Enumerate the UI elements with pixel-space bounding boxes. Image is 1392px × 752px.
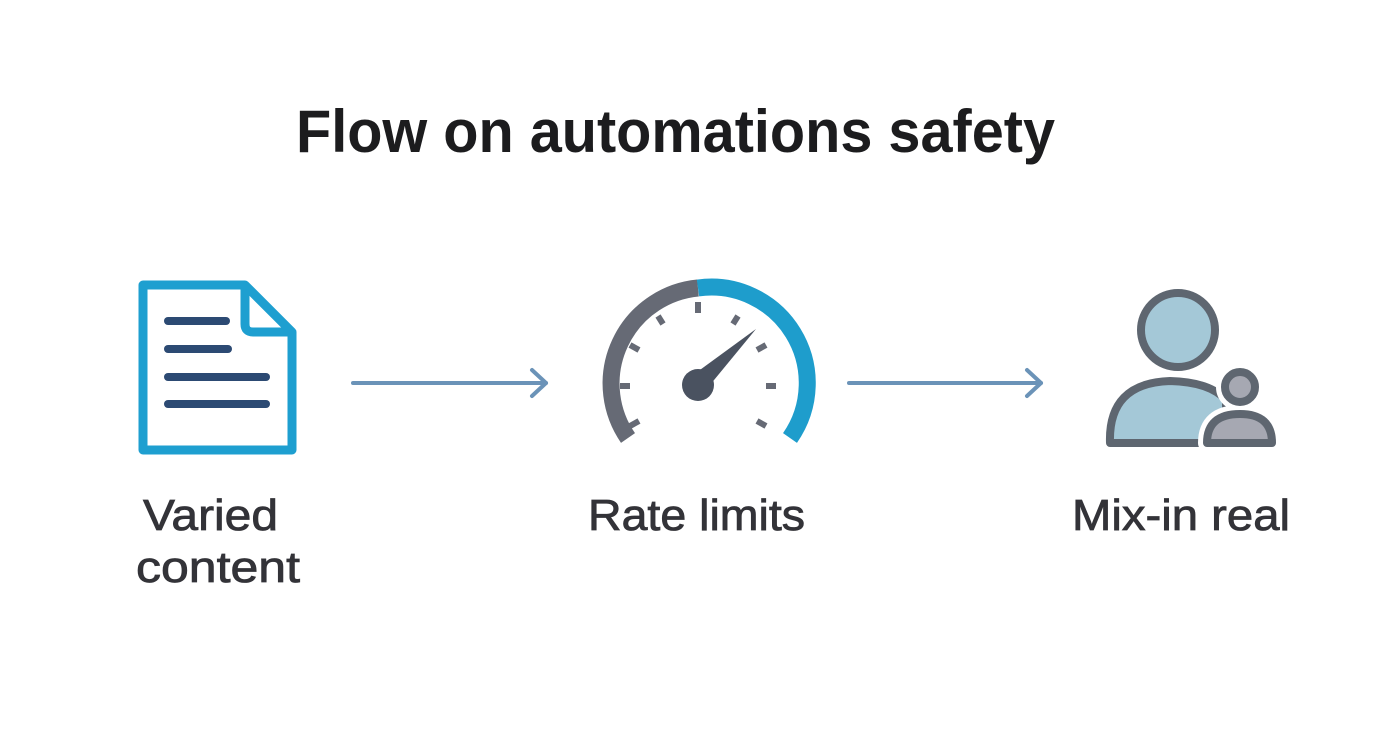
icon: document (143, 285, 292, 450)
arrow 2 (849, 370, 1041, 396)
label: varied content: content (136, 543, 300, 592)
title: Flow on automations safety (296, 98, 1056, 165)
icon: people (1110, 293, 1272, 443)
icon: speedometer gauge (611, 287, 807, 438)
label: mix-in real: Mix-in real (1072, 491, 1290, 540)
label: rate limits: Rate limits (588, 491, 805, 540)
arrow 1 (353, 370, 546, 396)
label: varied content: Varied (143, 491, 278, 540)
label: varied content (136, 491, 300, 592)
